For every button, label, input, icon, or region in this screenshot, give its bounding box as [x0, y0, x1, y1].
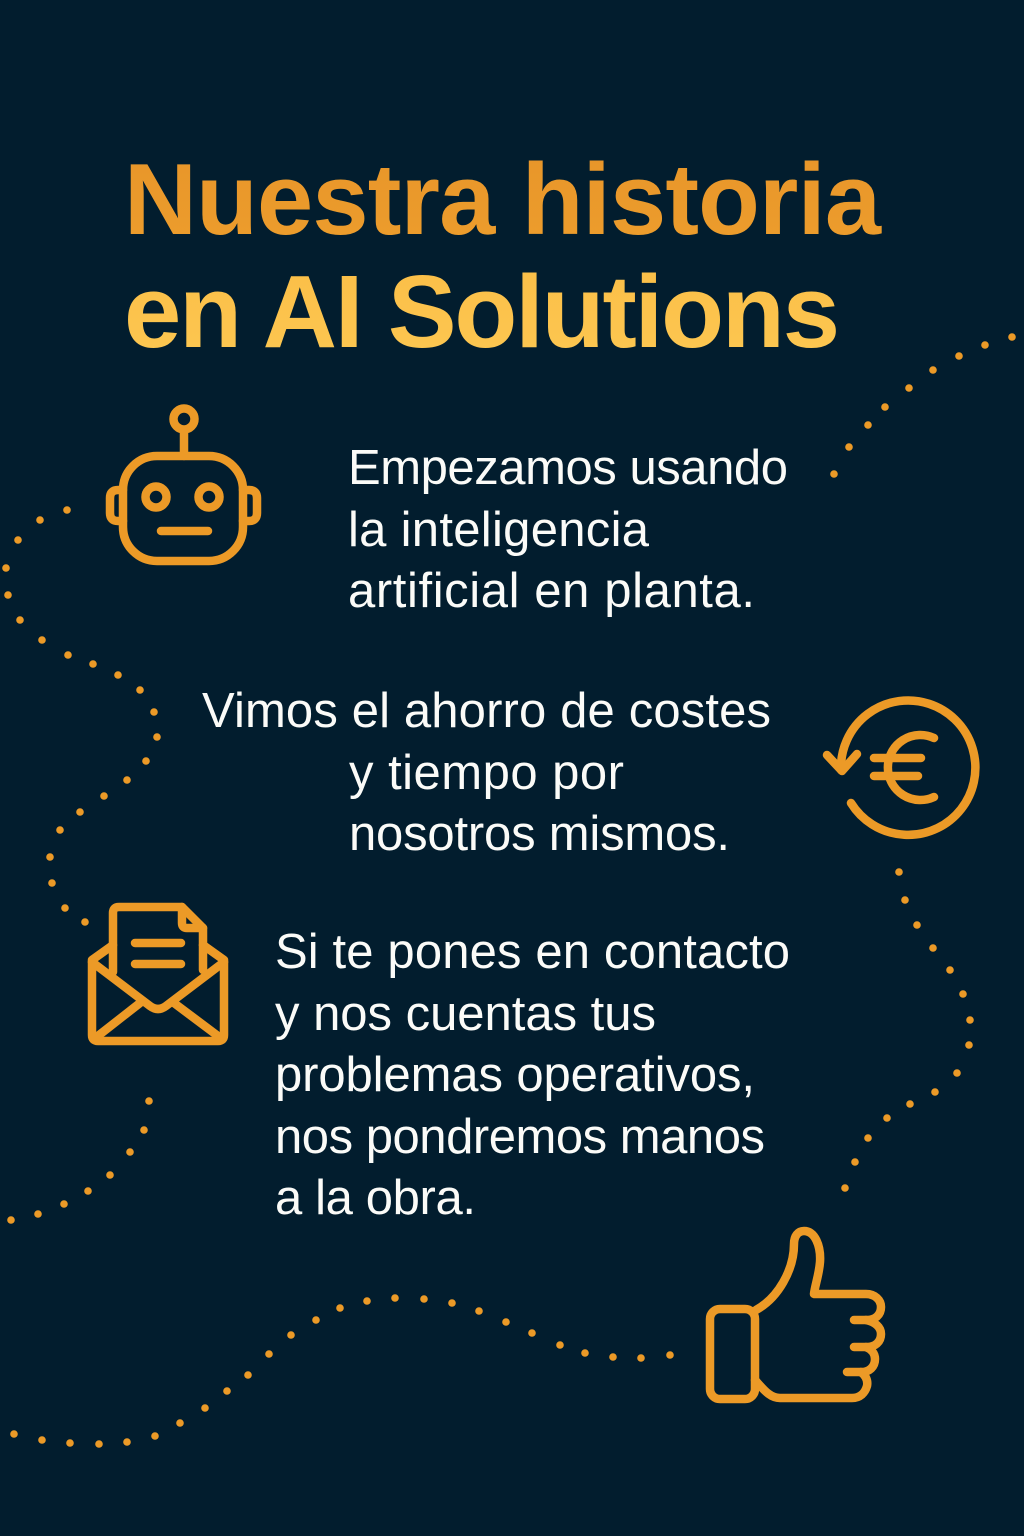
icon: thumbs up — [710, 1231, 881, 1399]
text block: second step: Vimos el ahorro de costes — [202, 684, 771, 738]
icon: euro with circular arrow — [827, 700, 975, 835]
title: Nuestra historia — [124, 144, 882, 256]
icon: robot — [110, 408, 257, 561]
text block: third step: problemas operativos, — [275, 1048, 755, 1102]
text block: third step: a la obra. — [275, 1171, 476, 1225]
dotted path: top right — [830, 333, 1016, 478]
dotted path: bottom wave — [10, 1294, 674, 1448]
text block: first step: la inteligencia — [348, 503, 650, 557]
text block: third step: y nos cuentas tus — [275, 987, 656, 1041]
text block: second step: nosotros mismos. — [349, 807, 730, 861]
text block: first step: artificial en planta. — [348, 564, 755, 618]
text block: third step: nos pondremos manos — [275, 1110, 765, 1164]
text block: third step — [275, 925, 790, 1225]
title: en AI Solutions — [124, 254, 840, 369]
dotted path: left lower — [7, 1097, 153, 1224]
text block: third step: Si te pones en contacto — [275, 925, 790, 979]
text block: first step: Empezamos usando — [348, 441, 788, 495]
text block: first step — [348, 441, 788, 618]
dotted path: left middle — [2, 506, 161, 926]
text block: second step: y tiempo por — [349, 746, 624, 800]
title — [124, 144, 882, 369]
dotted path: right lower — [841, 868, 974, 1192]
icon: open envelope with document — [92, 907, 224, 1041]
text block: second step — [202, 684, 771, 861]
